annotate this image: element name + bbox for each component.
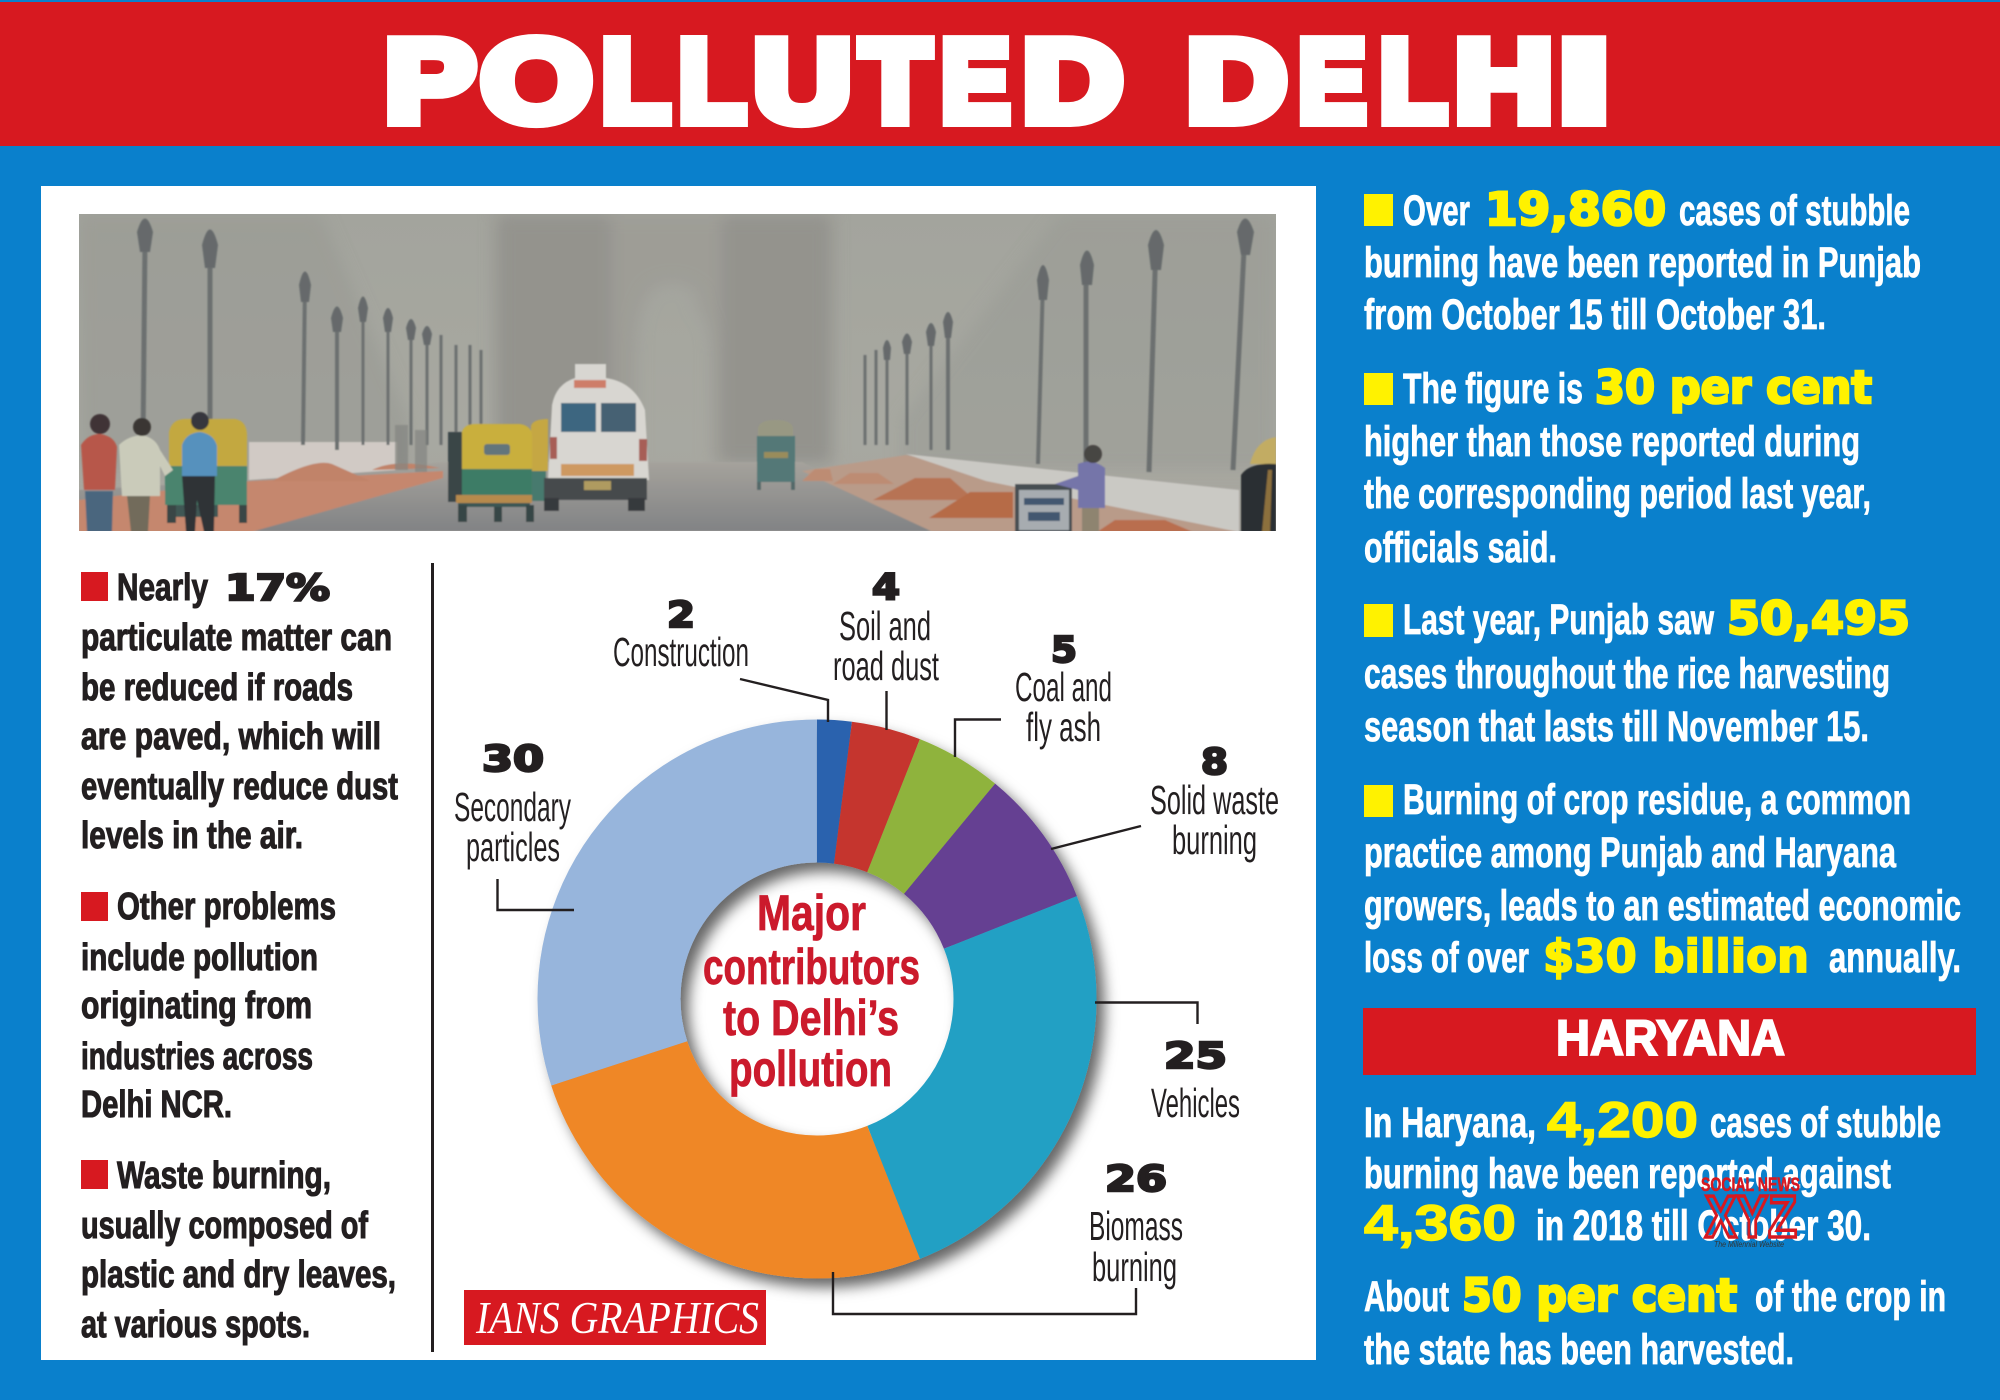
label: coal and fly ash: Coal and xyxy=(1015,664,1112,710)
bullet paragraph: 17 percent: Nearly xyxy=(117,567,208,609)
bullet paragraph: 17 percent: be reduced if roads xyxy=(81,667,353,709)
bullet paragraph: other problems: Delhi NCR. xyxy=(81,1084,232,1126)
Haryana heading banner xyxy=(1363,1008,1976,1075)
road and sand xyxy=(79,462,1276,532)
paragraph: 4,200 cases: 4,360 xyxy=(1364,1195,1516,1251)
bullet paragraph: 30 per cent: officials said. xyxy=(1364,524,1557,572)
left text column xyxy=(81,567,398,1346)
paragraph: 50 per cent: the state has been harvested. xyxy=(1364,1326,1794,1374)
label: biomass burning: burning xyxy=(1092,1244,1177,1290)
watermark: Social News XYZ: The Millennial Website xyxy=(1714,1240,1784,1249)
bullet paragraph: 17 percent: levels in the air. xyxy=(81,815,303,857)
chart centre title: to Delhi’s xyxy=(723,990,899,1046)
street lamps xyxy=(137,218,1254,472)
paragraph: 4,200 cases xyxy=(1364,1092,1941,1251)
bullet paragraph: 19,860 cases xyxy=(1364,183,1921,339)
watermark: Social News XYZ: SOCIAL NEWS xyxy=(1701,1175,1800,1196)
label: soil and road dust: road dust xyxy=(833,643,939,689)
bullet paragraph: waste burning: plastic and dry leaves, xyxy=(81,1254,396,1296)
title banner: T xyxy=(861,16,930,146)
donut chart: major contributors xyxy=(454,567,1279,1314)
street vendor and cart xyxy=(1015,445,1105,532)
title banner: I xyxy=(1559,16,1609,146)
label: solid waste burning: Solid waste xyxy=(1150,777,1279,823)
fences xyxy=(249,442,397,480)
bullet paragraph: 50,495 cases: 50,495 xyxy=(1727,592,1910,645)
bullet paragraph: waste burning xyxy=(81,1155,396,1346)
right column: Punjab facts xyxy=(1364,183,1961,983)
label: coal and fly ash xyxy=(955,630,1112,757)
title banner: P xyxy=(385,16,475,146)
bullet paragraph: other problems xyxy=(81,886,336,1126)
label: secondary particles: Secondary xyxy=(454,784,571,830)
people on left xyxy=(81,412,217,532)
bullet paragraph: 19,860 cases: Over xyxy=(1403,187,1470,235)
bullet paragraph: waste burning: usually composed of xyxy=(81,1205,368,1247)
bullet paragraph: 17 percent: 17% xyxy=(225,568,330,609)
panel: white main panel xyxy=(41,186,1316,1360)
donut ring xyxy=(609,791,1025,1207)
bullet paragraph: 17 percent: particulate matter can xyxy=(81,617,392,659)
title banner: U xyxy=(754,16,851,146)
bullet paragraph: 50,495 cases xyxy=(1364,592,1910,751)
sand piles xyxy=(272,463,440,481)
title banner: O xyxy=(481,16,592,146)
bullet paragraph: $30 billion: $30 billion xyxy=(1543,930,1809,983)
chart centre title: contributors xyxy=(703,939,920,995)
bullet paragraph: 19,860 cases: from October 15 till October 31. xyxy=(1364,291,1826,339)
yellow autorickshaw xyxy=(448,419,548,522)
label: biomass burning: Biomass xyxy=(1089,1203,1183,1249)
bullet paragraph: 17 percent xyxy=(81,567,398,857)
bullet paragraph: 30 per cent: 30 per cent xyxy=(1595,361,1872,414)
title banner: D xyxy=(1023,16,1123,146)
bullet paragraph: 30 per cent: The figure is xyxy=(1403,365,1583,413)
label: construction: Construction xyxy=(613,629,749,675)
label: biomass burning xyxy=(833,1159,1183,1314)
label: soil and road dust: Soil and xyxy=(839,603,931,649)
bullet paragraph: other problems: originating from xyxy=(81,985,312,1027)
paragraph: 4,200 cases: in 2018 till October 30. xyxy=(1536,1202,1871,1250)
bullet paragraph: waste burning: Waste burning, xyxy=(117,1155,331,1197)
Haryana facts xyxy=(1364,1092,1946,1374)
ambulance xyxy=(544,364,649,511)
bullet paragraph: other problems: include pollution xyxy=(81,937,318,979)
auto at right edge xyxy=(1241,437,1276,532)
label: solid waste burning xyxy=(1051,742,1279,863)
label: vehicles: Vehicles xyxy=(1151,1080,1240,1126)
haze overlay xyxy=(82,404,1276,531)
label: coal and fly ash: 5 xyxy=(1051,630,1077,671)
title banner: L xyxy=(602,16,670,146)
autorickshaw behind cyclist xyxy=(165,419,247,523)
label: vehicles: 25 xyxy=(1164,1036,1227,1077)
label: vehicles xyxy=(1095,1002,1240,1126)
label: coal and fly ash: fly ash xyxy=(1026,704,1101,750)
watermark: Social News XYZ: XYZ xyxy=(1705,1184,1797,1250)
bullet paragraph: 30 per cent xyxy=(1364,361,1872,572)
distant pedestrians xyxy=(395,425,427,472)
paragraph: 4,200 cases: In Haryana, xyxy=(1364,1099,1536,1147)
photo: smoggy Rajpath with India Gate xyxy=(79,214,1276,532)
title banner: E xyxy=(1298,16,1366,146)
title banner: L xyxy=(679,16,746,146)
title banner: H xyxy=(1455,16,1553,146)
chart centre title: Major xyxy=(757,885,866,941)
chart centre title xyxy=(703,885,920,1097)
label: secondary particles xyxy=(454,739,574,910)
paragraph: 4,200 cases: 4,200 xyxy=(1547,1092,1698,1148)
label: secondary particles: particles xyxy=(466,824,560,870)
label: construction: 2 xyxy=(667,595,695,636)
bullet paragraph: waste burning: at various spots. xyxy=(81,1304,310,1346)
title banner: D xyxy=(1187,16,1287,146)
bullet paragraph: $30 billion xyxy=(1364,776,1961,983)
bullet paragraph: 50,495 cases: Last year, Punjab saw xyxy=(1403,596,1714,644)
Haryana heading banner: HARYANA xyxy=(1556,1010,1785,1066)
credit: IANS Graphics: IANS GRAPHICS xyxy=(475,1292,759,1343)
title banner xyxy=(0,2,2000,146)
bullet paragraph: 19,860 cases: 19,860 xyxy=(1485,183,1666,236)
label: solid waste burning: burning xyxy=(1172,817,1257,863)
label: biomass burning: 26 xyxy=(1105,1159,1167,1200)
bullet paragraph: 17 percent: are paved, which will xyxy=(81,716,381,758)
bullet paragraph: 17 percent: eventually reduce dust xyxy=(81,766,398,808)
paragraph: 50 per cent xyxy=(1364,1269,1946,1374)
label: solid waste burning: 8 xyxy=(1201,742,1228,783)
chart centre title: pollution xyxy=(729,1041,892,1097)
label: soil and road dust: 4 xyxy=(872,567,900,608)
label: soil and road dust xyxy=(833,567,939,730)
bullet paragraph: other problems: Other problems xyxy=(117,886,336,928)
small distant auto xyxy=(757,420,795,490)
title banner: E xyxy=(941,16,1010,146)
title banner: L xyxy=(1380,16,1447,146)
label: secondary particles: 30 xyxy=(482,739,544,780)
bullet paragraph: other problems: industries across xyxy=(81,1036,313,1078)
paragraph: 50 per cent: About xyxy=(1364,1273,1449,1321)
paragraph: 50 per cent: 50 per cent xyxy=(1462,1269,1737,1322)
bullet paragraph: $30 billion: loss of over xyxy=(1364,934,1529,982)
label: construction xyxy=(613,595,828,722)
